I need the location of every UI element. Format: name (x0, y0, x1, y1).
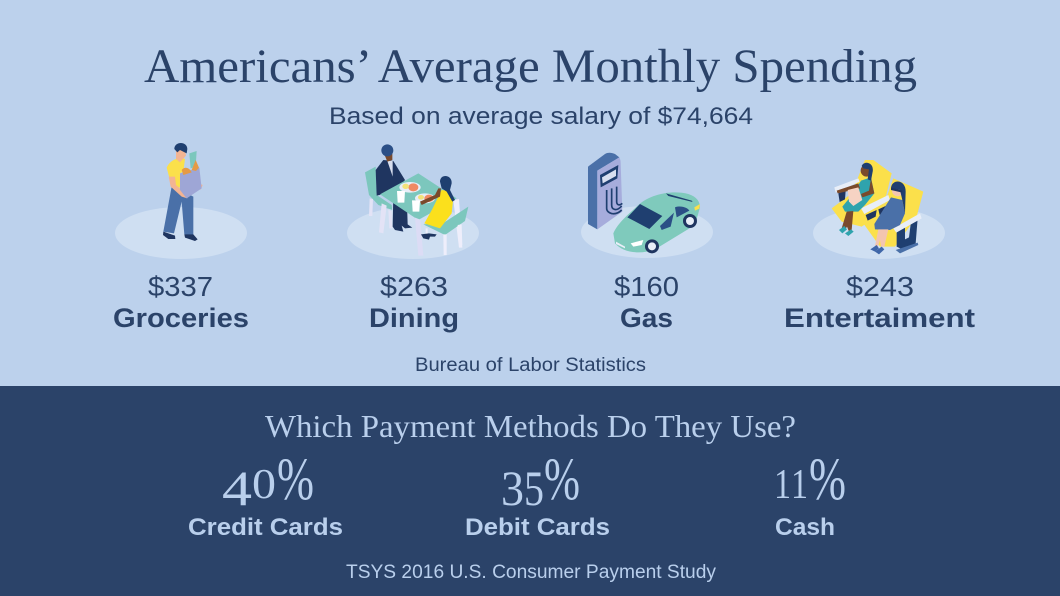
stat: entertainment (784, 271, 975, 333)
stat: cash: 1 (791, 462, 808, 508)
stat: credit cards: % (277, 446, 314, 512)
icon: gas (581, 153, 713, 258)
stat: cash (774, 446, 846, 541)
panel: payment methods (0, 386, 1060, 596)
stat: groceries (113, 271, 249, 333)
stat: entertainment: $243 (846, 271, 914, 302)
stat: credit cards: 4 (222, 460, 252, 516)
stat: debit cards: 5 (524, 460, 544, 516)
stat: dining: Dining (369, 303, 459, 333)
stat: debit cards: 3 (501, 460, 524, 516)
stat: dining (369, 271, 459, 333)
subtitle: Based on average salary of $74,664 (329, 103, 753, 130)
stat: debit cards: Debit Cards (465, 514, 610, 541)
source: bureau of labor statistics: Bureau of Labor Statistics (415, 355, 646, 376)
stat: cash: 1 (774, 462, 791, 508)
title: Americans’ Average Monthly Spending (144, 40, 917, 93)
stat: groceries: $337 (148, 271, 213, 302)
stat: gas: Gas (620, 303, 673, 333)
source: tsys study: TSYS 2016 U.S. Consumer Payment Study (346, 562, 716, 583)
stat: debit cards: % (544, 446, 580, 512)
panel: spending (0, 0, 1060, 386)
stat: credit cards: Credit Cards (188, 514, 343, 541)
stat: groceries: Groceries (113, 303, 249, 333)
stat: cash: Cash (775, 514, 835, 541)
stat: gas: $160 (614, 271, 679, 302)
icon: groceries (115, 143, 247, 259)
stat: cash: % (809, 446, 846, 512)
heading: payment methods: Which Payment Methods Do They Use? (265, 408, 796, 444)
stat: gas (614, 271, 679, 333)
stat: credit cards (188, 446, 343, 541)
icon: entertainment (813, 160, 945, 259)
stat: credit cards: 0 (252, 462, 276, 508)
stat: debit cards (465, 446, 610, 541)
icon: dining (347, 144, 479, 259)
stat: entertainment: Entertaiment (784, 303, 975, 333)
stat: dining: $263 (380, 271, 448, 302)
